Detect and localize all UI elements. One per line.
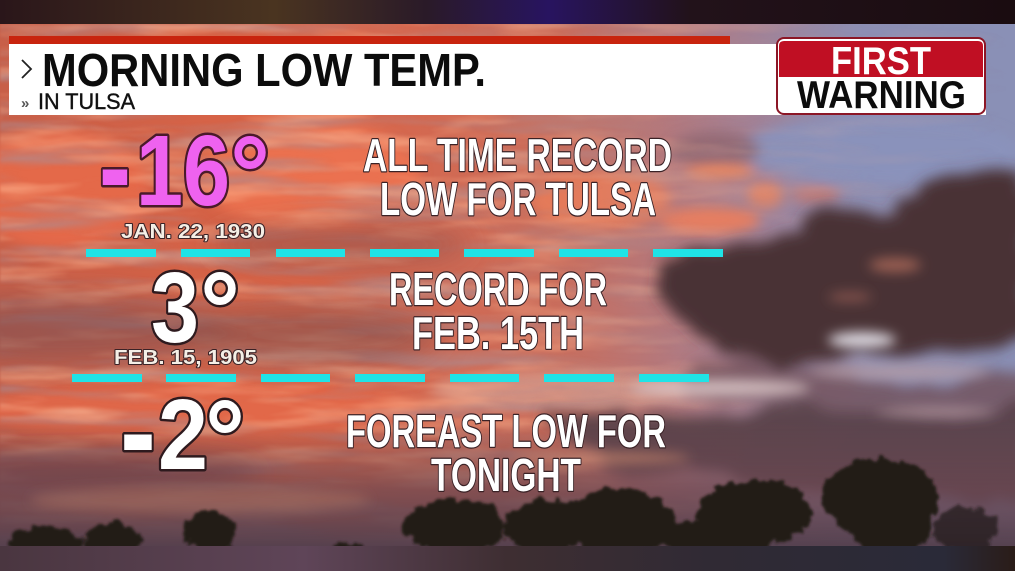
warning label: WARNING [797,74,966,117]
mauve mid-level cloud bands [0,223,470,495]
description: record for Feb. 15th: RECORD FOR [389,263,607,315]
top dark strip [0,0,1015,24]
white banner panel [9,44,986,115]
bottom dark strip [0,546,1015,571]
description: forecast low for tonight: TONIGHT [431,449,581,501]
badge outline [777,38,985,114]
temperature: 3 degrees: ° [200,249,240,370]
first warning badge [777,38,985,117]
description: forecast low for tonight: FOREAST LOW FOR [346,405,666,457]
temperature: minus 2 degrees: ° [205,377,245,498]
description: all time record: LOW FOR TULSA [380,173,656,225]
heading: MORNING LOW TEMP. [42,44,486,96]
description: all time record: ALL TIME RECORD [363,129,672,181]
first label: FIRST [831,40,931,83]
dark storm cloud [540,169,1015,500]
sky streak texture [0,24,708,474]
description: record for Feb. 15th [389,263,607,359]
temperature: minus 16 degrees: 16 [136,115,230,227]
dashed divider two [72,374,709,382]
red accent bar [9,36,730,44]
temperature: minus 2 degrees [120,358,245,504]
forecast row [120,358,666,504]
double chevron icon: » [21,95,29,112]
date: Jan. 22, 1930: JAN. 22, 1930 [121,221,265,243]
date: Feb. 15, 1905: FEB. 15, 1905 [114,347,257,369]
badge red top [779,41,983,77]
description: forecast low for tonight [346,405,666,501]
temperature: minus 16 degrees [99,93,270,239]
all-time record row [99,93,672,243]
daily record row [114,249,607,370]
temperature: minus 16 degrees: - [99,93,131,239]
description: all time record [363,129,672,225]
temperature: minus 16 degrees: ° [230,113,270,234]
tree line silhouette [7,459,997,562]
temperature: minus 2 degrees: 2 [158,379,208,491]
temperature: 3 degrees [151,249,240,370]
temperature: minus 2 degrees: - [120,358,156,504]
dashed divider one [86,249,723,257]
temperature: 3 degrees: 3 [151,252,199,364]
subheading: IN TULSA [38,89,135,114]
description: record for Feb. 15th: FEB. 15TH [412,307,584,359]
title banner [9,36,986,115]
chevron icon [22,60,31,78]
